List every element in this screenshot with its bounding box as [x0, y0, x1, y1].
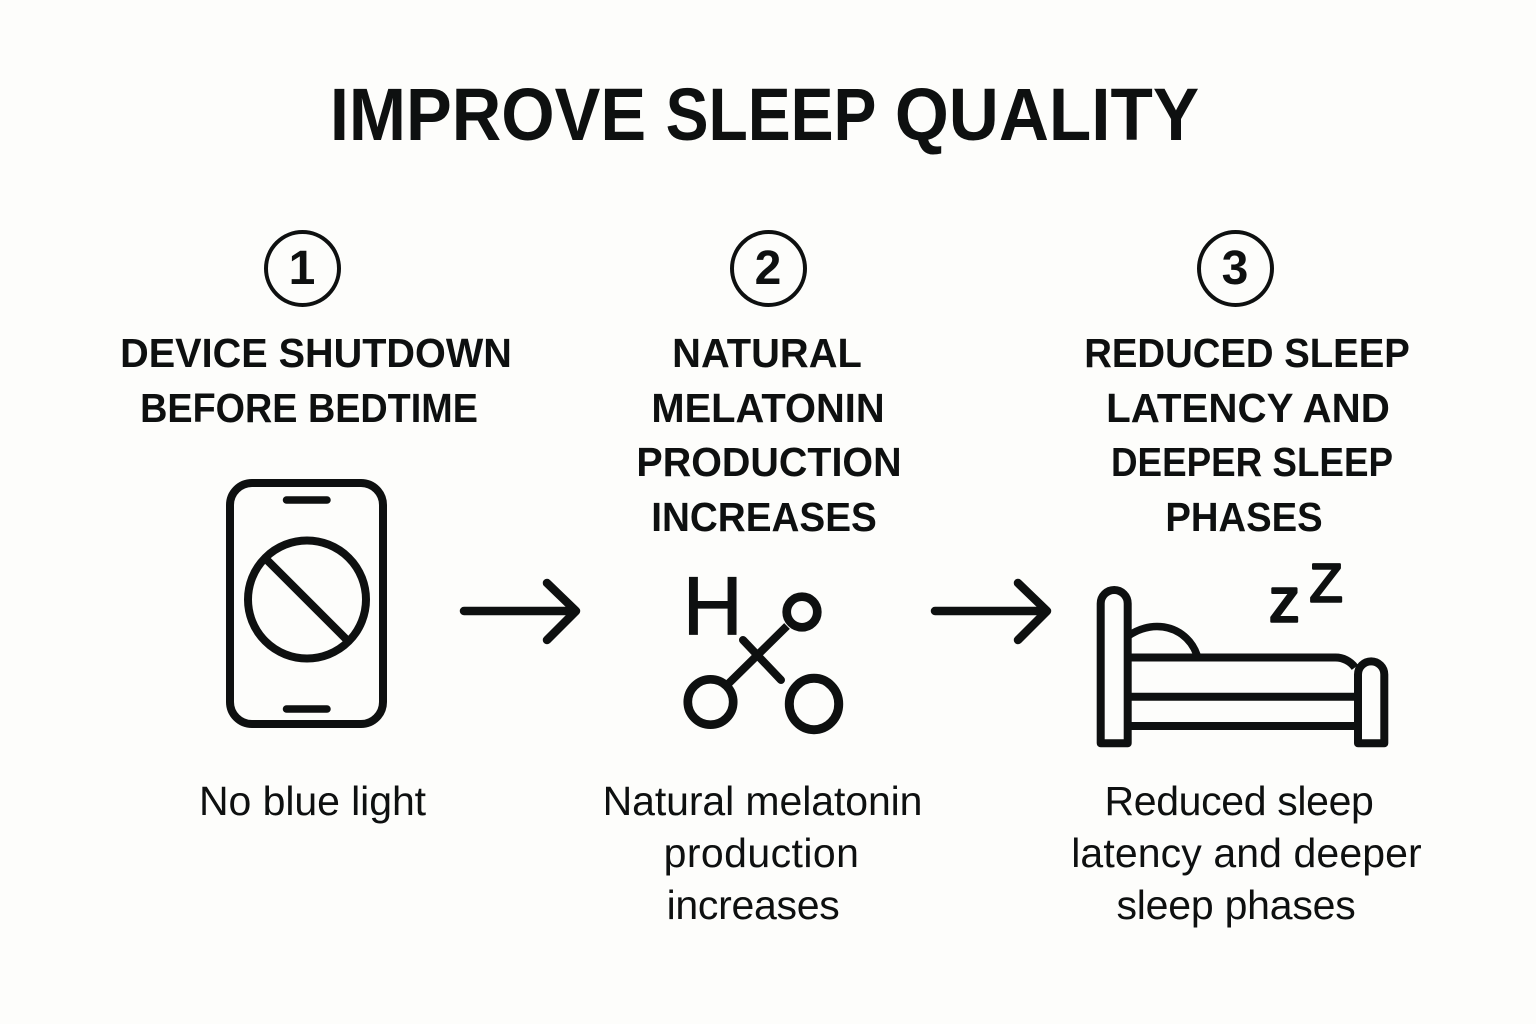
- step 3 description: latency and deeper: [1071, 830, 1422, 876]
- step 2 heading: PRODUCTION: [636, 439, 901, 485]
- icon: phone with no-symbol: [230, 483, 383, 724]
- title: [330, 73, 1199, 156]
- step 2 heading: INCREASES: [651, 494, 877, 540]
- arrow: step 1 to step 2: [464, 583, 576, 640]
- step 3 heading: LATENCY AND: [1106, 384, 1389, 430]
- step 2 description: increases: [667, 882, 839, 928]
- step 1 number badge: [264, 230, 340, 307]
- arrow: step 2 to step 3: [935, 583, 1047, 640]
- step 2 description: Natural melatonin: [603, 778, 922, 824]
- step 2 heading: [636, 330, 901, 540]
- step 1 heading: [120, 330, 511, 430]
- step 1 heading: BEFORE BEDTIME: [140, 384, 477, 430]
- step 3 heading: PHASES: [1165, 494, 1322, 540]
- step 1 heading: DEVICE SHUTDOWN: [120, 330, 511, 376]
- step 2 heading: MELATONIN: [651, 384, 884, 430]
- step 3 heading: [1084, 330, 1409, 540]
- step 2 heading: NATURAL: [672, 330, 862, 376]
- step 3 number badge: [1196, 230, 1274, 307]
- icon: molecule: [683, 560, 839, 730]
- step 3 number badge: 3: [1222, 242, 1248, 295]
- title: QUALITY: [895, 73, 1199, 156]
- step 2 description: [603, 778, 922, 928]
- step 2 description: production: [664, 830, 859, 876]
- step 3 heading: DEEPER SLEEP: [1110, 439, 1393, 485]
- step 3 description: sleep phases: [1117, 882, 1355, 928]
- step 1 description: No blue light: [199, 778, 426, 824]
- icon: molecule: H: [683, 560, 743, 652]
- step 2 number badge: 2: [755, 242, 781, 295]
- icon: bed with sleep symbols: Z: [1310, 554, 1343, 614]
- step 3 description: Reduced sleep: [1105, 778, 1373, 824]
- title: IMPROVE: [330, 73, 646, 156]
- step 1 number badge: 1: [289, 242, 315, 295]
- icon: bed with sleep symbols: z: [1269, 567, 1300, 636]
- step 3 heading: REDUCED SLEEP: [1084, 330, 1409, 376]
- title: SLEEP: [665, 73, 876, 156]
- icon: bed with sleep symbols: [1101, 554, 1384, 743]
- step 3 description: [1071, 778, 1422, 928]
- step 2 number badge: [730, 230, 806, 307]
